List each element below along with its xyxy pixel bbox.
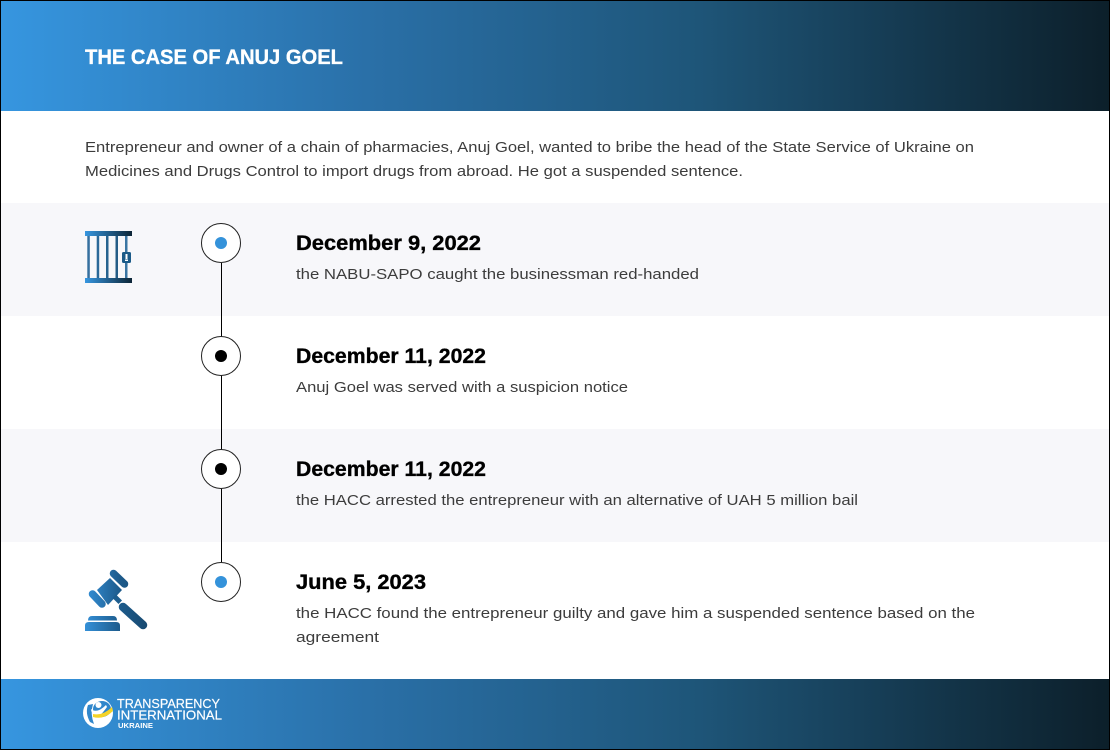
logo: Transparency International Ukraine: UKRAINE: [118, 723, 153, 730]
intro text: [85, 139, 974, 180]
row band: December 11 arrest: [0, 429, 1110, 542]
icon: jail bars: [85, 231, 132, 283]
timeline node 3: [202, 450, 240, 488]
logo: Transparency International Ukraine: TRANSPARENCY: [117, 696, 220, 711]
logo: Transparency International Ukraine: INTERNATIONAL: [117, 708, 222, 722]
timeline node 4: [202, 562, 240, 602]
icon: gavel: [85, 574, 143, 631]
event 2: December 11, 2022: [296, 345, 486, 368]
timeline node 1: [202, 224, 240, 262]
event 4: the HACC found the entrepreneur guilty and gave him a suspended sentence based on the: [296, 605, 975, 622]
event 3: the HACC arrested the entrepreneur with an alternative of UAH 5 million bail: [296, 492, 858, 509]
intro text: Entrepreneur and owner of a chain of pharmacies, Anuj Goel, wanted to bribe the head of the State Service of Ukraine on: [85, 139, 974, 156]
title: THE CASE OF ANUJ GOEL: [85, 46, 343, 69]
event 4: June 5, 2023: [296, 571, 426, 594]
event 3: [296, 458, 858, 509]
event 3: December 11, 2022: [296, 458, 486, 481]
event 2: Anuj Goel was served with a suspicion notice: [296, 379, 628, 396]
event 1: the NABU-SAPO caught the businessman red-handed: [296, 266, 699, 283]
row band: December 9: [0, 203, 1110, 316]
event 2: [296, 345, 628, 396]
intro text: Medicines and Drugs Control to import drugs from abroad. He got a suspended sentence.: [85, 163, 743, 180]
event 4: agreement: [296, 629, 380, 646]
timeline node 2: [202, 336, 240, 376]
footer band: [0, 679, 1110, 750]
header band: [0, 0, 1110, 111]
timeline connector: [220, 263, 222, 562]
event 4: [296, 571, 975, 646]
logo: Transparency International Ukraine: [83, 696, 222, 730]
event 1: [296, 232, 699, 283]
event 1: December 9, 2022: [296, 232, 481, 255]
